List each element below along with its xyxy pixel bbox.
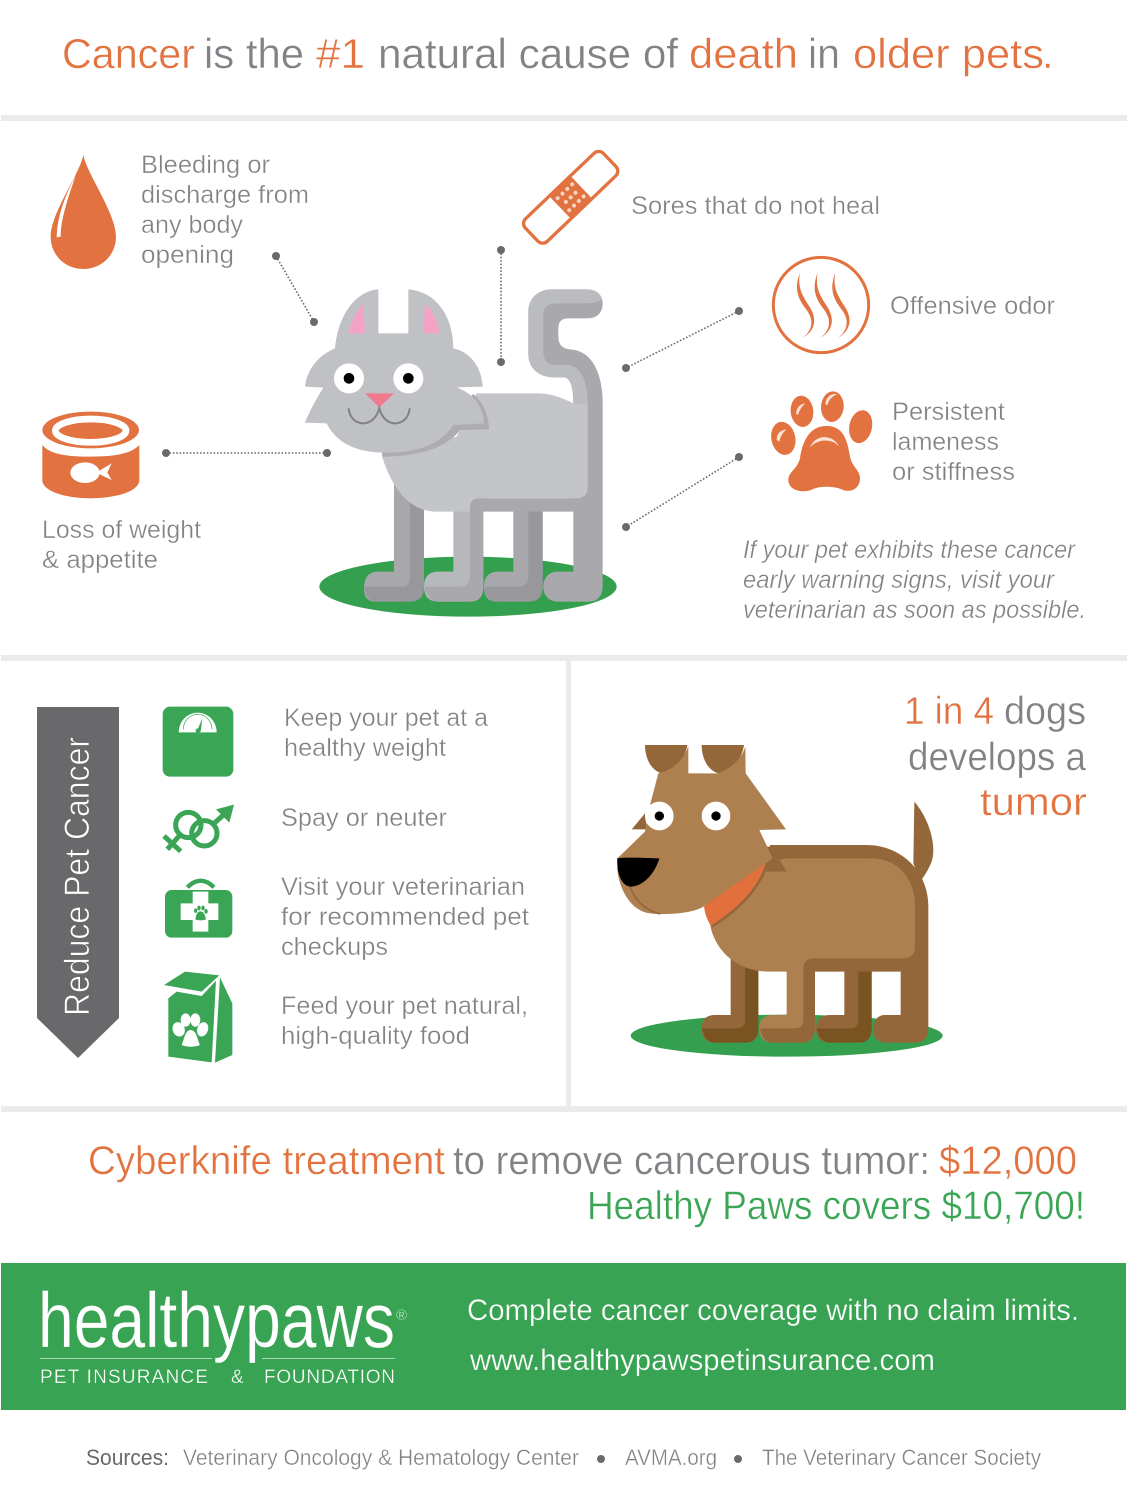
panel: warning signs: [42, 149, 1086, 624]
panel: green footer band: [1, 1263, 1126, 1410]
logo: healthypaws: [38, 1276, 407, 1388]
text: bleeding: opening: [141, 241, 234, 269]
logo: healthypaws: PET INSURANCE: [40, 1367, 208, 1388]
dog statistic text: [904, 690, 1087, 824]
logo: healthypaws: FOUNDATION: [264, 1367, 395, 1388]
text: coverage tagline: Complete cancer coverage with no claim limits.: [467, 1294, 1079, 1327]
icon: cat food can: [42, 412, 139, 498]
text: cyberknife cost: [88, 1139, 1085, 1228]
dog statistic text: dogs: [1004, 690, 1086, 733]
text: cyberknife cost: $12,000: [939, 1139, 1077, 1183]
title: natural cause of: [378, 30, 678, 77]
logo: healthypaws: healthypaws: [38, 1276, 395, 1364]
text: loss of weight: [42, 516, 201, 574]
text: healthy weight: [284, 704, 488, 762]
title: [62, 30, 1054, 77]
dog statistic text: develops a: [908, 736, 1086, 779]
text: lameness: [892, 398, 1015, 486]
title: is the: [204, 30, 304, 77]
text: odor: Offensive odor: [890, 292, 1055, 320]
icon: scale: [163, 707, 233, 777]
text: warning advice: If your pet exhibits these cancer: [743, 536, 1077, 564]
banner arrow: [37, 707, 119, 1058]
icon: bandage: [521, 149, 621, 246]
dog statistic text: 1 in 4: [904, 690, 994, 733]
icon: pet food bag: [164, 972, 232, 1063]
text: lameness: or stiffness: [892, 458, 1015, 486]
connector: sores: [497, 246, 505, 366]
title: older pets: [853, 30, 1044, 77]
text: warning advice: early warning signs, visit your: [743, 566, 1056, 594]
icon: gender symbols: [164, 805, 234, 851]
logo: healthypaws: ®: [396, 1307, 407, 1324]
sources: Sources:: [86, 1445, 169, 1470]
text: healthy weight: Keep your pet at a: [284, 704, 488, 732]
text: bleeding: Bleeding or: [141, 151, 270, 179]
text: healthy weight: healthy weight: [284, 734, 446, 762]
connector: odor: [622, 307, 743, 372]
text: bleeding: [141, 151, 309, 269]
text: visit veterinarian: [281, 873, 529, 961]
sources: AVMA.org: [625, 1445, 717, 1470]
text: feed natural food: Feed your pet natural,: [281, 992, 528, 1020]
sources: Veterinary Oncology & Hematology Center: [183, 1445, 579, 1470]
text: feed natural food: high-quality food: [281, 1022, 470, 1050]
text: cyberknife cost: Healthy Paws covers $10,700!: [587, 1184, 1085, 1228]
text: cyberknife cost: to remove cancerous tumor:: [453, 1139, 930, 1183]
icon: odor: [773, 257, 869, 353]
text: loss of weight: Loss of weight: [42, 516, 201, 544]
icon: blood drop: [51, 155, 116, 269]
text: spay or neuter: Spay or neuter: [281, 804, 447, 832]
text: sores: Sores that do not heal: [631, 192, 880, 220]
text: cyberknife cost: Cyberknife treatment: [88, 1139, 445, 1183]
title: in: [808, 30, 840, 77]
sources: [86, 1445, 1041, 1470]
title: death: [689, 30, 798, 77]
text: warning advice: [743, 536, 1086, 624]
dog statistic text: tumor: [980, 781, 1087, 824]
text: visit veterinarian: checkups: [281, 933, 388, 961]
text: warning advice: veterinarian as soon as possible.: [743, 596, 1086, 624]
title: Cancer: [62, 30, 195, 77]
connector: weight loss: [162, 449, 331, 457]
title: #1: [316, 30, 365, 77]
text: lameness: Persistent: [892, 398, 1005, 426]
text: feed natural food: [281, 992, 528, 1050]
text: visit veterinarian: Visit your veterinarian: [281, 873, 525, 901]
text: visit veterinarian: for recommended pet: [281, 903, 529, 931]
connector: bleeding: [272, 252, 318, 326]
text: bleeding: discharge from: [141, 181, 309, 209]
connector: lameness: [622, 453, 743, 531]
panel: dog statistic: [617, 690, 1087, 1057]
icon: paw: [768, 390, 875, 491]
icon: medical kit: [165, 881, 232, 938]
text: lameness: lameness: [892, 428, 999, 456]
logo: healthypaws: &: [231, 1367, 244, 1388]
title: .: [1042, 30, 1054, 77]
banner arrow: Reduce Pet Cancer: [58, 737, 97, 1016]
dog illustration: [617, 745, 943, 1057]
text: loss of weight: & appetite: [42, 546, 158, 574]
text: bleeding: any body: [141, 211, 243, 239]
panel: reduce pet cancer: [37, 704, 529, 1063]
text: website: www.healthypawspetinsurance.com: [469, 1344, 935, 1377]
sources: The Veterinary Cancer Society: [762, 1445, 1041, 1470]
cat illustration: [305, 289, 617, 617]
